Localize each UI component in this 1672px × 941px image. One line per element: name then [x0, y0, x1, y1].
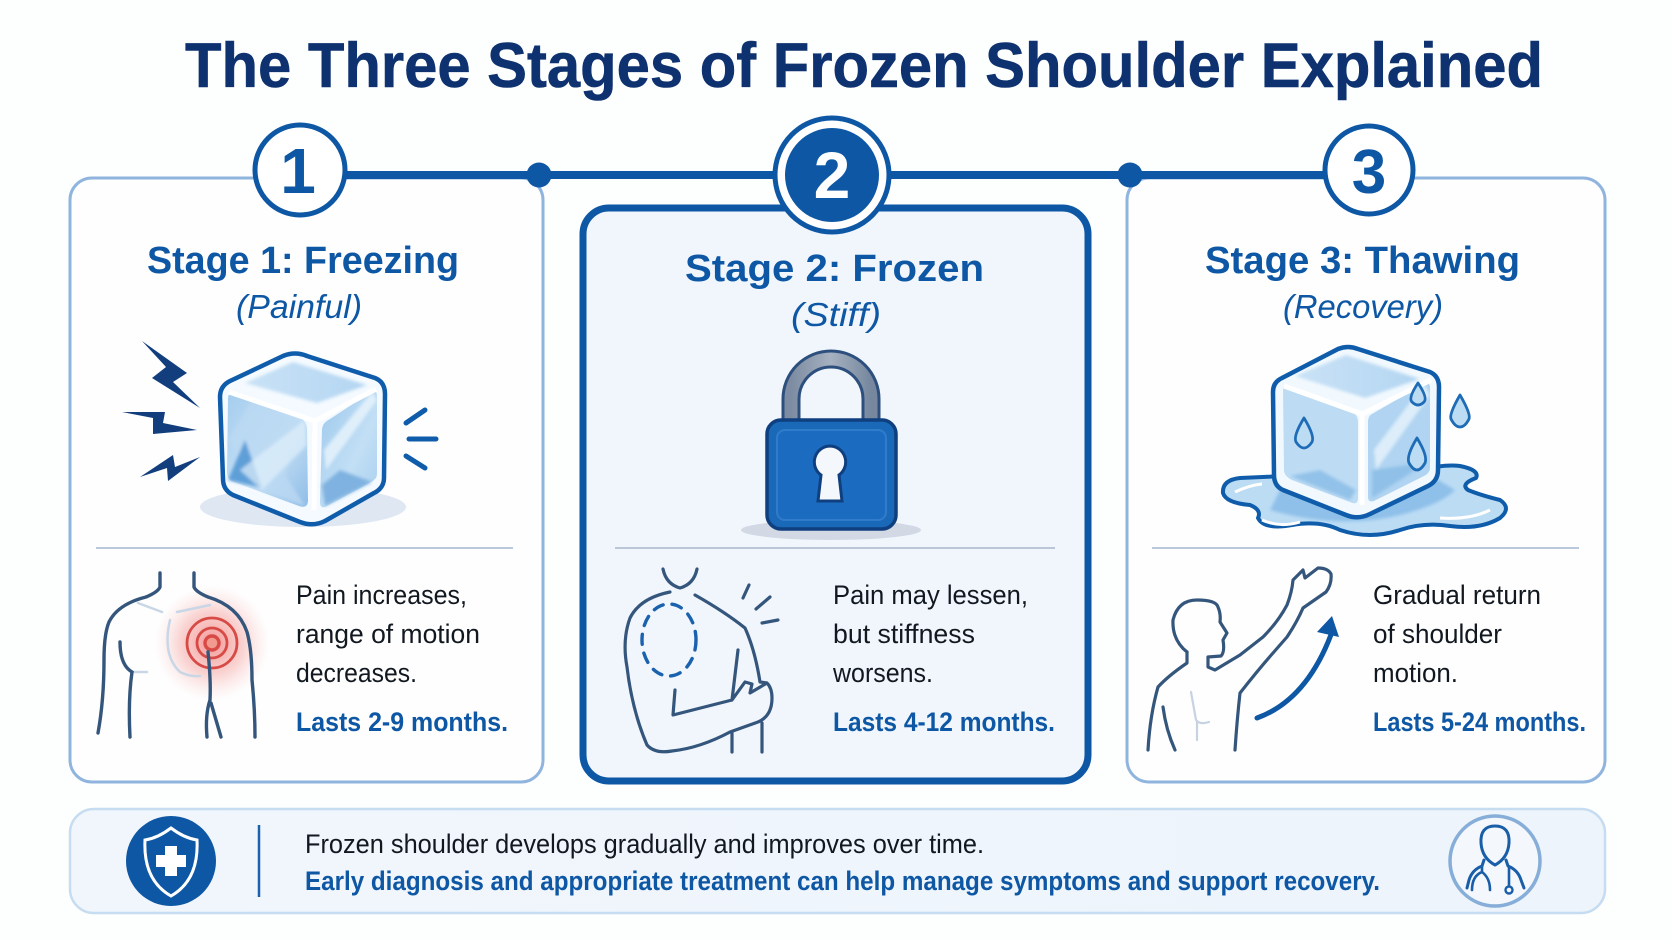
- text: stage 1 description: decreases.: [296, 658, 417, 688]
- dashed circle: [642, 604, 696, 676]
- timeline connector: [345, 162, 1325, 188]
- divider: [96, 547, 513, 549]
- text: footer line 1: Frozen shoulder develops gradually and improves over time.: [305, 829, 984, 859]
- icon: lightning bolts: [122, 341, 200, 481]
- cube ridge highlight: [1284, 380, 1431, 505]
- subheading: recovery: (Recovery): [1283, 288, 1443, 325]
- icon: padlock: [741, 359, 921, 540]
- text: stage 1 description: range of motion: [296, 619, 480, 649]
- rays: [406, 410, 436, 468]
- text: stage 2 description: [832, 580, 1028, 688]
- arrow: upward motion: [1257, 616, 1339, 718]
- panel: stage 3 thawing: [1127, 178, 1605, 782]
- subheading: stiff: (Stiff): [791, 296, 881, 333]
- badge: number 3: [1325, 126, 1413, 214]
- text: stage 3 duration: Lasts 5-24 months.: [1373, 707, 1586, 737]
- figure: person raising arm: [1148, 568, 1331, 750]
- subheading: painful: (Painful): [236, 288, 362, 325]
- heading: stage 1: Stage 1: Freezing: [147, 240, 459, 282]
- divider: [258, 825, 260, 897]
- heading: stage 3: Stage 3: Thawing: [1205, 240, 1520, 282]
- title: The Three Stages of Frozen Shoulder Explained: [185, 31, 1543, 101]
- divider: [615, 547, 1055, 549]
- text: footer line 2: Early diagnosis and appropriate treatment can help manage symptoms and support recovery.: [305, 866, 1380, 896]
- badge: number 2: [775, 118, 889, 232]
- badge: number 1: 1: [280, 135, 316, 207]
- divider: [1152, 547, 1579, 549]
- text: stage 1 duration: Lasts 2-9 months.: [296, 707, 508, 737]
- icon: shield with cross: [126, 816, 216, 906]
- text: stage 2 description: Pain may lessen,: [833, 580, 1028, 610]
- text: stage 1 description: Pain increases,: [296, 580, 467, 610]
- badge: number 2: 2: [814, 138, 850, 212]
- cube ridge highlight: [229, 389, 376, 510]
- drops: [1295, 383, 1469, 470]
- text: stage 2 description: but stiffness: [833, 619, 975, 649]
- icon: melting ice cube: [1223, 347, 1506, 535]
- icon: ice cube: [200, 354, 436, 527]
- text: stage 3 description: motion.: [1373, 658, 1458, 688]
- panel: stage 2 frozen: [583, 208, 1088, 781]
- text: stage 2 duration: Lasts 4-12 months.: [833, 707, 1055, 737]
- text: stage 3 description: [1373, 580, 1541, 688]
- heading: stage 2: Stage 2: Frozen: [685, 248, 984, 290]
- panel: stage 1 freezing: [70, 178, 543, 782]
- text: stage 1 description: [296, 580, 480, 688]
- figure: chest with shoulder pain target: [98, 573, 270, 737]
- text: stage 3 description: Gradual return: [1373, 580, 1541, 610]
- text: stage 2 description: worsens.: [832, 658, 933, 688]
- badge: number 3: 3: [1352, 138, 1386, 207]
- text: stage 3 description: of shoulder: [1373, 619, 1502, 649]
- icon: doctor: [1450, 816, 1540, 906]
- footer banner: [70, 809, 1605, 913]
- figure: stiff shoulder with dashed circle: [625, 569, 778, 752]
- badge: number 1: [255, 125, 345, 215]
